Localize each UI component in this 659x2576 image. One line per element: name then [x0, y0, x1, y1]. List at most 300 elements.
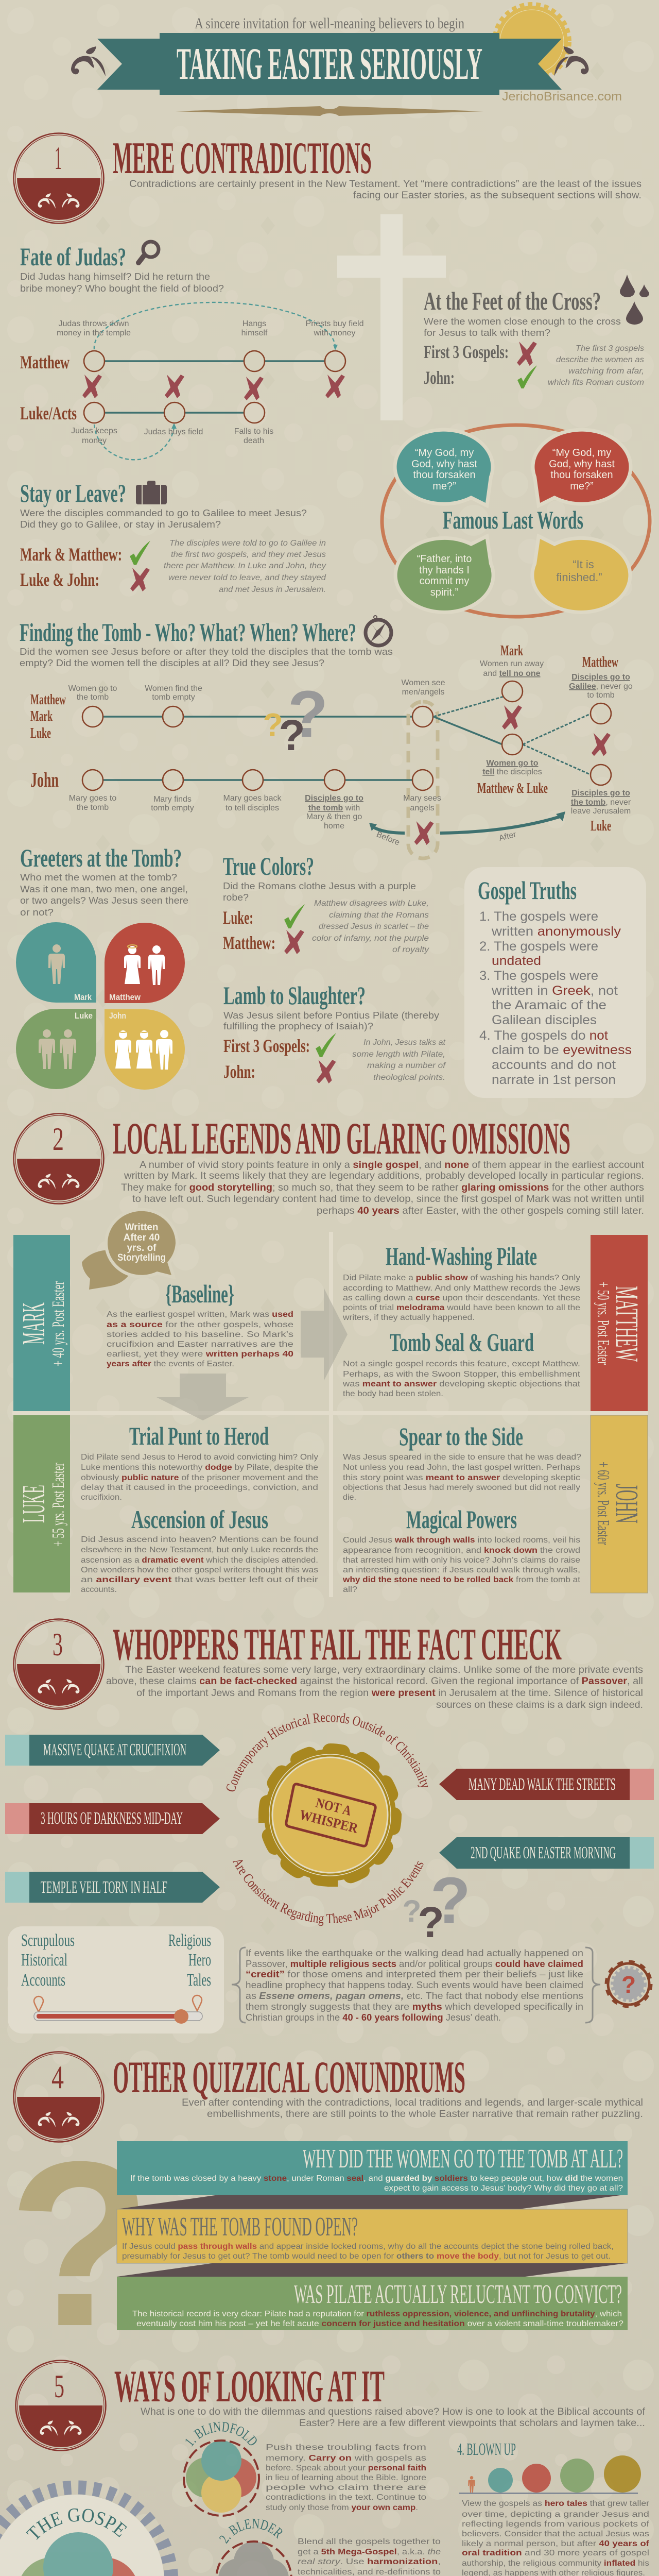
banner: second quake [439, 1837, 654, 1869]
question [20, 647, 393, 668]
section 3 intro: sources on these claims is a dark sign indeed. [436, 1700, 643, 1710]
heading: Famous Last Words [443, 505, 583, 534]
note: Matthew disagrees with Luke, [314, 899, 429, 908]
scale labels: Scrupulous [21, 1931, 75, 1950]
scale labels: Historical [21, 1951, 67, 1970]
note: watching from afar, [568, 367, 644, 376]
icon: question marks: ? [279, 711, 305, 759]
block: baseline: As the earliest gospel written, Mark was used [107, 1310, 293, 1319]
seal: not a whisper: NOT A [315, 1795, 353, 1819]
note: were never told to leave, and they stayed [168, 573, 326, 582]
site name: JerichoBrisance.com [502, 90, 622, 104]
panel: why was the tomb found open: presumably for Jesus to get out? The tomb would need to be open for others to move the body , but not for Jesus to get out. [122, 2252, 611, 2261]
banner: darkness: 3 HOURS OF DARKNESS MID-DAY [41, 1809, 183, 1828]
question: Did the women see Jesus before or after they told the disciples that the tomb was [20, 647, 393, 657]
branches [433, 681, 611, 785]
block: spear to the side: objections that Jesus had merely swooned but did not really [343, 1483, 580, 1492]
bubble: Matthew: me?” [570, 481, 594, 492]
section 4 intro [182, 2097, 643, 2120]
question [20, 272, 224, 294]
verdicts [424, 342, 537, 388]
question: for Jesus to talk with them? [424, 328, 550, 338]
bubble: Matthew: thou forsaken [550, 469, 613, 481]
diagram: the gospels venn [0, 0, 171, 2576]
panel: fate of Judas [20, 242, 363, 460]
braces [232, 1947, 600, 2023]
panel: stay or leave [20, 479, 326, 594]
verdicts [223, 1033, 336, 1083]
Luke outcome: the tomb, never [571, 798, 631, 807]
section 3 argument: Passover, multiple religious sects and/or political groups could have claimed [246, 1959, 583, 1969]
scale labels: Religious [168, 1931, 211, 1950]
John timeline [69, 770, 441, 831]
quadrant: Mark: Mark [74, 992, 92, 1002]
note: and met Jesus in Jerusalem. [219, 585, 326, 594]
way 1: blindfold [182, 2419, 426, 2516]
note: of royalty [392, 945, 429, 954]
block: magical powers: Could Jesus walk through walls into locked rooms, veil his [343, 1536, 580, 1545]
list: 2. The gospels were [479, 939, 598, 954]
block: baseline: stories added to his baseline. So Mark’s [107, 1330, 293, 1339]
verdicts: First 3 Gospels: [223, 1036, 310, 1056]
way 2: blender: real story . Use harmonization , [298, 2557, 441, 2566]
way 4: blown up: believers. Consider that the actual Jesus was [462, 2530, 649, 2538]
section 3 argument: Christian groups in the 40 - 60 years following Jesus’ death. [246, 2012, 501, 2023]
synoptic timeline: men/angels [402, 688, 444, 697]
list: the Aramaic of the [492, 998, 606, 1012]
gospel labels: Matthew [30, 692, 66, 708]
bubble: Matthew: “My God, my [552, 447, 611, 459]
panel: was pilate reluctant: The historical record is very clear: Pilate had a reputation for ruthless oppression, violence, and unflinching brutality , which [132, 2310, 622, 2318]
synoptic timeline: Women go to [68, 684, 117, 693]
icon: magnifier [138, 242, 159, 263]
block: magical powers: Magical Powers [406, 1505, 517, 1534]
scale labels: Hero [188, 1951, 211, 1970]
block: magical powers: an interesting question: if Jesus could walk through walls, [343, 1566, 580, 1574]
panel: why did the women: If the tomb was closed by a heavy stone, under Roman seal, and guarded by soldiers to keep people out, how did the women [130, 2174, 623, 2183]
block: baseline: crucifixion and Easter narratives are the [107, 1340, 293, 1349]
block: spear to the side: Not unless you read John, the last gospel written. Perhaps [343, 1463, 580, 1472]
list: accounts and do not [492, 1058, 616, 1072]
subtitle: A sincere invitation for well-meaning believers to begin [195, 15, 464, 32]
arrow: down [157, 1374, 249, 1420]
bubbles: storytelling: Written [125, 1222, 159, 1233]
John timeline: home [324, 822, 344, 831]
Matthew outcome: Disciples go to [571, 673, 630, 682]
Matthew timeline [20, 319, 363, 372]
way 4: blown up: over time, depicting a grander Jesus and [462, 2510, 649, 2519]
bubble: Luke: “Father, into [417, 553, 472, 565]
list: 4. The gospels do not [479, 1028, 608, 1043]
way 1: blindfold: 1. BLINDFOLD [185, 2421, 257, 2447]
verdicts: John: [424, 367, 455, 388]
block: hand-washing pilate: Did Pilate make a public show of washing his hands? Only [343, 1274, 580, 1282]
question: Did they go to Galilee, or stay in Jerusalem? [20, 519, 221, 530]
verdicts: Mark & Matthew: [20, 544, 122, 565]
note [352, 1038, 446, 1082]
Matthew and Luke outcome: tell the disciples [482, 768, 542, 776]
block: trial punt to herod: Did Pilate send Jesus to Herod to avoid convicting him? Only [81, 1453, 318, 1462]
question [424, 316, 621, 338]
gospel labels: John [30, 768, 59, 791]
bubble: Matthew [534, 432, 629, 503]
scale labels: Accounts [21, 1971, 65, 1990]
Luke/Acts timeline: Judas buys field [144, 428, 203, 436]
question: Was Jesus silent before Pontius Pilate (thereby [223, 1010, 439, 1021]
bubble: Luke: commit my [420, 575, 469, 587]
way 1: blindfold: before. Speak about your personal faith [266, 2464, 426, 2472]
title ribbon [97, 33, 562, 95]
Matthew and Luke outcome: Women go to [486, 759, 539, 768]
block: baseline: years after the events of Easter. [107, 1360, 234, 1368]
block: trial punt to herod: Trial Punt to Herod [129, 1421, 269, 1450]
synoptic timeline: tomb empty [152, 693, 195, 702]
bubbles: storytelling [82, 1211, 176, 1290]
block: ascension of jesus: an ancillary event that was better left out of their [81, 1575, 319, 1584]
list: narrate in 1st person [492, 1073, 616, 1087]
question: Were the disciples commanded to go to Galilee to meet Jesus? [20, 508, 307, 518]
tab: Matthew: MATTHEW [609, 1286, 644, 1362]
quadrant: John [105, 1009, 185, 1090]
list: Galilean disciples [492, 1013, 597, 1027]
icon: question marks: ? [430, 1864, 471, 1938]
section 2 intro: perhaps 40 years after Easter, with the other gospels coming still later. [317, 1206, 644, 1216]
section 4 intro: Even after contending with the contradictions, local traditions and legends, and larger-scale mythical [182, 2097, 643, 2108]
note [548, 344, 644, 387]
John timeline: Mary finds [153, 795, 192, 804]
verdicts: Luke & John: [20, 569, 99, 590]
verdicts: Luke: [223, 907, 253, 928]
tab: John: + 60 yrs. Post Easter [594, 1462, 613, 1545]
panel: was pilate reluctant [117, 2277, 628, 2330]
note: describe the women as [556, 355, 644, 364]
block: hand-washing pilate: points of trial melodrama would have been known to all the [343, 1303, 580, 1312]
way 1: blindfold: contradictions in the text. Continue to [266, 2493, 426, 2502]
arc text bottom: Are Consistent Regarding These Major Public Events [233, 1860, 423, 1926]
Matthew timeline: Priests buy field [306, 319, 363, 328]
dashed arcs [94, 302, 338, 460]
seal: not a whisper: WHISPER [298, 1807, 360, 1836]
question: bribe money? Who bought the field of blood? [20, 283, 224, 294]
icon: question marks [403, 1864, 471, 1946]
question [20, 508, 307, 530]
question: Was it one man, two men, one angel, [20, 884, 188, 894]
icon: compass [366, 616, 391, 646]
block: magical powers: why did the stone need to be rolled back from the tomb at [342, 1575, 581, 1584]
block: ascension of jesus: One wonders how the other gospel writers thought this was [81, 1566, 318, 1574]
way 4: blown up: oral tradition and 30 more years of gospel [462, 2549, 649, 2557]
block: ascension of jesus: accounts. [81, 1585, 117, 1594]
way 2: blender [216, 2516, 441, 2576]
verdicts: John: [223, 1061, 255, 1082]
note [312, 899, 429, 954]
question: Were the women close enough to the cross [424, 316, 621, 327]
way 1: blindfold: Push these troubling facts from [266, 2443, 426, 2452]
note: dressed Jesus in scarlet – the [319, 922, 429, 931]
block: ascension of jesus: Ascension of Jesus [131, 1505, 268, 1534]
Luke/Acts timeline: money [82, 436, 107, 445]
note: claiming that the Romans [329, 911, 429, 920]
block: tomb seal and guard [342, 1328, 581, 1398]
tab: Luke: + 55 yrs. Post Easter [49, 1463, 68, 1547]
way 4: blown up: reflecting legends from various pockets of [462, 2520, 650, 2529]
question: or two angels? Was Jesus seen there [20, 895, 188, 906]
block: trial punt to herod [81, 1421, 318, 1502]
banner: temple veil: TEMPLE VEIL TORN IN HALF [41, 1878, 167, 1897]
icon: question marks: ? [288, 677, 328, 751]
block: ascension of jesus [81, 1505, 319, 1594]
verdicts [223, 904, 305, 954]
quadrant: Luke [16, 1009, 96, 1089]
Luke/Acts timeline: Luke/Acts [20, 403, 77, 423]
Matthew outcome: to tomb [587, 691, 615, 700]
quadrant: John: John [109, 1011, 126, 1021]
note: The first 3 gospels [576, 344, 644, 353]
icon: question marks [263, 677, 328, 759]
block: baseline [107, 1279, 293, 1368]
John timeline: to tell disciples [226, 804, 279, 812]
panel: true colors [223, 852, 429, 954]
synoptic timeline: Women find the [145, 684, 202, 693]
section 3 badge: 3 [53, 1626, 63, 1663]
bubble: Luke [397, 539, 492, 611]
bubbles: storytelling: Storytelling [117, 1252, 166, 1263]
section 2 intro: to have left out. Such legendary content had time to develop, since the first gospel of Mark was not written until [132, 1194, 644, 1205]
question: or not? [20, 907, 54, 918]
arrow: right [301, 1288, 348, 1381]
John timeline: Mary goes to [69, 794, 116, 803]
block: ascension of jesus: Did Jesus ascend into heaven? Mentions can be found [81, 1535, 318, 1544]
Matthew and Luke outcome [477, 759, 548, 796]
section 1 intro [129, 179, 641, 201]
arrow: after [440, 811, 565, 843]
banner: darkness [5, 1803, 220, 1834]
Matthew timeline: Matthew [20, 352, 70, 372]
question: empty? Did the women tell the disciples at all? Did they see Jesus? [20, 658, 324, 668]
gospel labels: Mark [30, 708, 53, 724]
section 3 badge [13, 1619, 104, 1709]
question: fulfilling the prophecy of Isaiah)? [223, 1021, 373, 1031]
bubble: Luke: thy hands I [419, 565, 470, 576]
block: trial punt to herod: crucifixion. [81, 1493, 122, 1502]
section 3 argument [246, 1948, 583, 2023]
John timeline: Mary goes back [223, 794, 282, 803]
section 4 badge [13, 2052, 104, 2142]
gospel labels: Luke [30, 725, 51, 741]
bubble: John [534, 539, 628, 611]
heading: Gospel Truths [478, 876, 577, 905]
icon: question marks: ? [418, 1898, 444, 1946]
arc text top: Contemporary Historical Records Outside of Christianity [227, 1713, 428, 1792]
shadow band [117, 2195, 624, 2209]
icon: drops [620, 275, 649, 325]
way 1: blindfold: memory. Carry on with gospels as [266, 2454, 426, 2463]
scale labels [21, 1931, 211, 1990]
block: magical powers: appearance from recognition, and knock down the crowd [343, 1546, 580, 1555]
heading: Lamb to Slaughter? [223, 981, 366, 1010]
Matthew timeline: Hangs [242, 319, 266, 328]
Matthew timeline: Judas throws down [59, 319, 129, 328]
bubble: Matthew: God, why hast [549, 459, 615, 470]
section 3 intro: of the important Jews and Romans from the region were present in Jerusalem at the time. Silence of historical [136, 1688, 643, 1699]
section 2 badge: 2 [53, 1121, 64, 1157]
cross [337, 214, 446, 420]
banner: temple veil [5, 1872, 220, 1903]
John timeline: Disciples go to [305, 794, 363, 803]
block: spear to the side: die. [343, 1493, 356, 1502]
tab: John [591, 1415, 648, 1593]
note: some length with Pilate, [352, 1050, 445, 1059]
arrow: before [369, 823, 405, 848]
block: tomb seal and guard: the body had been stolen. [343, 1389, 443, 1398]
panel: why was the tomb found open [117, 2209, 628, 2263]
gospel labels [30, 692, 66, 791]
section 1 badge: 1 [55, 140, 62, 176]
question: Did Judas hang himself? Did he return the [20, 272, 210, 282]
Mark outcome: Women run away [480, 659, 544, 668]
Matthew outcome: Matthew [582, 654, 619, 670]
note: which fits Roman custom [548, 378, 644, 387]
block: tomb seal and guard: was meant to answer developing skeptic objections that [342, 1380, 581, 1388]
Mark outcome: Mark [500, 643, 523, 659]
Mark outcome [480, 643, 544, 678]
quadrant: Luke: Luke [75, 1011, 93, 1021]
question [223, 1010, 439, 1031]
panel: was pilate reluctant: eventually cost him his post – yet he felt acute concern for justice and hesitation over a violent small-time troublemaker? [136, 2319, 623, 2328]
note: The disciples were told to go to Galilee in [169, 539, 326, 548]
section 4 badge: 4 [51, 2059, 64, 2095]
verdicts [20, 541, 150, 591]
block: baseline: {Baseline} [165, 1279, 234, 1308]
verdicts: First 3 Gospels: [424, 342, 509, 362]
block: spear to the side: Was Jesus speared in the side to ensure that he was dead? [343, 1453, 581, 1462]
quadrant: Mark [16, 922, 96, 1003]
panel: why did the women [117, 2141, 628, 2195]
section 2 badge [13, 1114, 104, 1204]
block: magical powers: all? [343, 1585, 357, 1594]
icon: suitcase [136, 481, 167, 504]
note: theological points. [373, 1073, 445, 1082]
note: there per Matthew. In Luke and John, they [164, 562, 326, 570]
John timeline: angels [410, 804, 435, 812]
panel: historical vs hero tales [8, 1926, 224, 2033]
Matthew timeline: himself [241, 329, 268, 337]
dividers [12, 1232, 648, 1597]
heading: Greeters at the Tomb? [20, 843, 182, 872]
section 1 intro: facing our Easter stories, as the subsequent sections will show. [353, 190, 641, 201]
question: Who met the women at the tomb? [20, 872, 177, 883]
list: 1. The gospels were [479, 909, 598, 924]
list: undated [492, 954, 541, 968]
heading: True Colors? [223, 852, 314, 880]
bubble: Mark: God, why hast [411, 459, 477, 470]
bubble: Luke: spirit.” [430, 587, 458, 598]
synoptic timeline [68, 679, 445, 727]
text: WAYS OF LOOKING AT IT [114, 2362, 385, 2412]
section 2 intro: written by Mark. It seems likely that they are legendary additions, probably developed locally in particular regions. [124, 1171, 644, 1181]
tab: Mark: + 40 yrs. Post Easter [49, 1281, 68, 1366]
section 2 intro [121, 1160, 645, 1216]
block: hand-washing pilate: Hand-Washing Pilate [386, 1242, 537, 1270]
way 1: blindfold: study only those from your own camp . [266, 2503, 418, 2512]
arrow: after: After [498, 830, 517, 843]
panel: famous last words [382, 425, 650, 617]
icon: giant question mark: ? [8, 2112, 151, 2375]
Matthew timeline: money in the temple [57, 329, 131, 337]
Matthew outcome [569, 654, 633, 700]
panel: lamb to slaughter [223, 981, 446, 1083]
slider [34, 1995, 202, 2024]
block: hand-washing pilate [342, 1242, 580, 1322]
panel: at the feet of the cross [424, 275, 649, 388]
block: baseline: earliest, yet they were written perhaps 40 [107, 1350, 293, 1359]
shadow band [117, 2263, 626, 2277]
way 2: blender: 2. BLENDER [216, 2516, 286, 2546]
icon: gear [607, 1962, 650, 2006]
Luke/Acts timeline: death [244, 436, 264, 445]
section 3 intro: above, these claims can be fact-checked against the historical record. Given the regional importance of Passover, all [106, 1676, 643, 1687]
flourish left [71, 46, 106, 76]
tab: John: JOHN [609, 1484, 644, 1523]
list: 3. The gospels were [479, 969, 598, 983]
scale labels: Tales [187, 1971, 211, 1990]
panel: finding the tomb [20, 616, 633, 858]
panel: why was the tomb found open: WHY WAS THE TOMB FOUND OPEN? [122, 2212, 358, 2242]
note: the first two gospels, and they met Jesus [171, 550, 326, 559]
quadrant: Matthew: Matthew [109, 992, 141, 1002]
x mark [414, 821, 433, 845]
block: spear to the side: Spear to the Side [399, 1422, 523, 1451]
block: trial punt to herod: obviously public nature of the prisoner movement and the [81, 1473, 318, 1482]
section 3 argument: “credit” for those omens and interpreted them per their beliefs – just like [246, 1969, 583, 1979]
Luke outcome: Luke [591, 818, 611, 834]
bubbles: storytelling: After 40 [124, 1232, 160, 1243]
block: magical powers: that arrested him with only his voice? John’s claims do raise [343, 1556, 580, 1565]
block: baseline: as a source for the other gospels, whose [107, 1320, 293, 1329]
section 5 intro: What is one to do with the dilemmas and questions raised above? How is one to look at the Biblical accounts of [141, 2406, 646, 2417]
note: making a number of [367, 1061, 446, 1070]
section 2 intro: They make for good storytelling ; so much so, that they seem to be rather glaring omissions for the other authors [121, 1182, 644, 1193]
way 4: blown up: 4. BLOWN UP [457, 2440, 516, 2459]
note [164, 539, 326, 594]
heading: Fate of Judas? [20, 242, 126, 271]
John timeline: the tomb [77, 803, 109, 812]
block: tomb seal and guard: Tomb Seal & Guard [390, 1328, 534, 1357]
block: hand-washing pilate: as calling down a curse upon their descendants. Yet these [343, 1294, 580, 1302]
Matthew timeline: with money [314, 329, 355, 337]
block: ascension of jesus: elsewhere in the New Testament, but only Luke records the [81, 1546, 318, 1554]
way 1: blindfold: in lieu of learning about the Bible. Ignore [266, 2473, 426, 2482]
question: robe? [223, 892, 249, 903]
heading: Stay or Leave? [20, 479, 126, 507]
section 3 intro [106, 1665, 643, 1710]
section 3 argument: headline prophecy that happens today. Such events would have been claimed [246, 1980, 583, 1990]
tab: Luke [13, 1415, 70, 1592]
dashed highlight [408, 702, 438, 858]
way 2: blender: get a 5th Mega-Gospel , a.k.a. the [298, 2548, 441, 2556]
bubble: Mark: thou forsaken [413, 469, 476, 481]
section 5 badge [15, 2361, 106, 2450]
banner: massive quake [5, 1735, 220, 1766]
way 1: blindfold: people who claim there are [266, 2483, 426, 2492]
section 5 intro [141, 2406, 646, 2429]
Luke outcome [571, 789, 631, 834]
icon: question marks: ? [263, 706, 283, 743]
block: tomb seal and guard: Not a single gospel records this feature, except Matthew. [343, 1360, 580, 1368]
Luke outcome: Disciples go to [571, 789, 630, 798]
John timeline: Mary & then go [306, 812, 362, 821]
section 3 argument: as Essene omens, pagan omens, etc. The fact that nobody else mentions [246, 1991, 583, 2001]
